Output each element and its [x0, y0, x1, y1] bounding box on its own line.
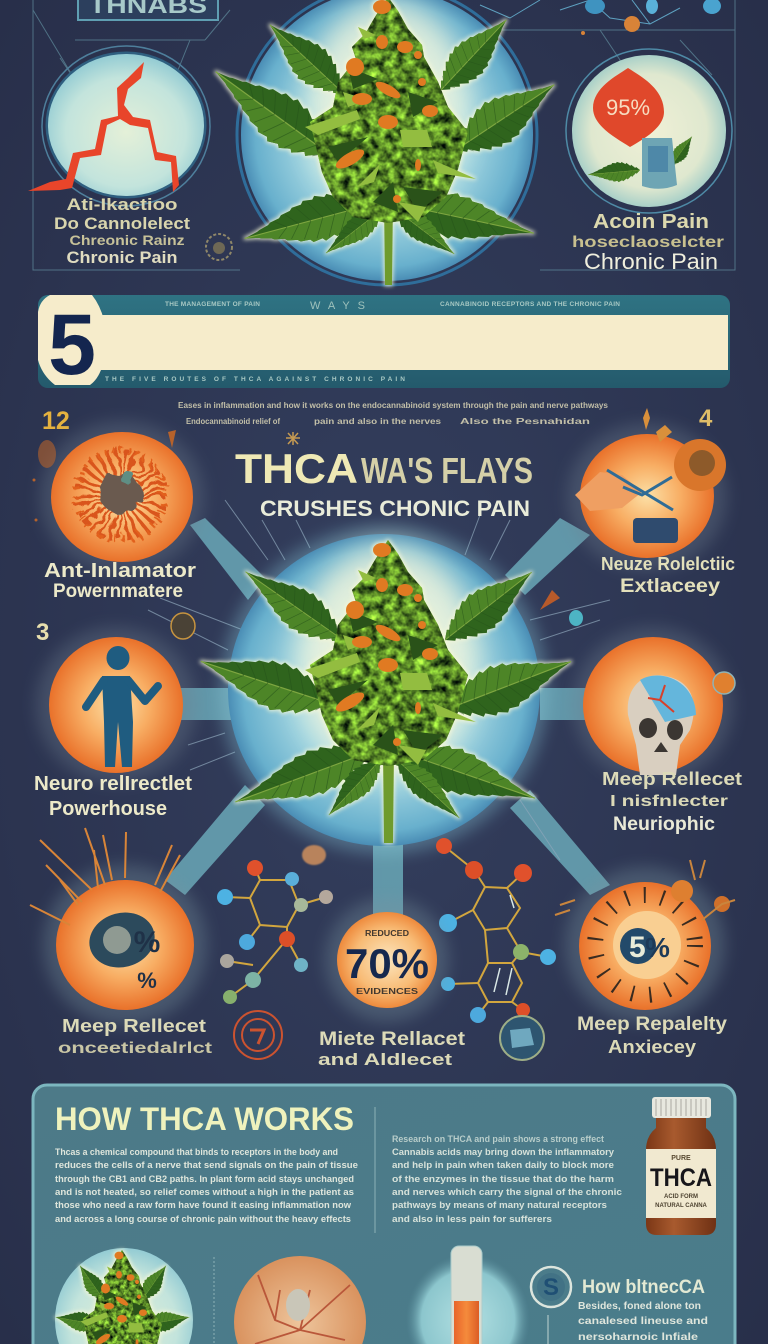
text block: right hero caption — [572, 211, 724, 274]
panel: left hero circle with pain chart — [28, 46, 210, 206]
text block: intro small print: Also the Pesnahidan — [460, 417, 590, 426]
banner: 5 ways — [38, 295, 730, 393]
text block: left hero caption: Ati-Ikactioo — [66, 195, 178, 214]
icon: inflamed burst — [76, 451, 164, 539]
icon: test tube — [406, 1246, 530, 1344]
icon: small round seal — [206, 234, 232, 260]
text block: lower right label: Meep Repalelty — [577, 1014, 727, 1035]
heading: how THCA works: HOW THCA WORKS — [55, 1101, 354, 1137]
text block: upper right label — [601, 554, 735, 597]
title: THCA ways flays: WA'S FLAYS — [361, 450, 533, 491]
subtitle: crushes chronic pain: CRUSHES CHONIC PAIN — [260, 496, 530, 521]
badge: THNABS — [78, 0, 218, 20]
numeral: 12: 12 — [42, 407, 70, 435]
illustration: central cannabis plant — [193, 540, 580, 843]
text block: left column — [55, 1147, 358, 1224]
chart: right molecule — [436, 838, 556, 1023]
text block: right column: and help in pain when taken daily to block more — [392, 1160, 614, 1170]
icon: small star above title — [286, 432, 300, 445]
text block: anti-inflammatory label: Powernmatere — [53, 581, 183, 602]
icon: red percentage drop: 95% — [606, 95, 650, 120]
banner small text: THE MANAGEMENT OF PAIN — [165, 301, 260, 308]
panel: hero centre circle — [237, 0, 537, 285]
panel: centre 70 percent circle — [325, 898, 449, 1022]
icon: dark percent blob: % — [137, 968, 157, 993]
divider — [374, 1107, 376, 1233]
icon: 5 percent dial: % — [645, 932, 670, 963]
icon: sparks and orange node right — [555, 860, 735, 920]
icon: small orange ball — [713, 672, 735, 694]
text block: anti-inflammatory label: Ant-Inlamator — [44, 560, 196, 582]
icon: sparks right of centre — [540, 590, 583, 626]
text block: left column: and across a long course of chronic pain without the heavy effects — [55, 1214, 351, 1224]
text block: how it works mini column: canalesed lineuse and — [578, 1316, 708, 1327]
icon: THCA bottle: ACID FORM — [664, 1194, 698, 1200]
icon: burst rays — [30, 828, 180, 925]
text block: lower left label — [58, 1016, 213, 1057]
text block: anti-inflammatory label — [44, 560, 196, 602]
icon: dark percent blob — [83, 905, 161, 993]
icon: orange coin — [674, 439, 726, 491]
text block: how it works mini column: nersoharnoic lnfiale — [578, 1332, 699, 1343]
divider — [547, 1315, 549, 1344]
text block: left column: Thcas a chemical compound that binds to receptors in the body and — [55, 1147, 338, 1157]
small label above percent: REDUCED — [365, 929, 409, 938]
text block: right column: Cannabis acids may bring down the inflammatory — [392, 1147, 614, 1157]
panel: central glow circle — [220, 526, 548, 854]
text block: left column: through the CB1 and CB2 paths. In plant form acid stays unchanged — [55, 1174, 354, 1184]
icon: skull — [628, 675, 696, 775]
chart: left molecule — [217, 845, 333, 1004]
icon: sparks upper right — [643, 408, 672, 442]
text block: lower right label — [577, 1014, 727, 1057]
text block: intro small print: Endocannabinoid relief of — [186, 417, 280, 426]
panel: lower left circle — [30, 828, 207, 1025]
text block: intro small print: Eases in inflammation and how it works on the endocannabinoid system through the pain and nerve pathways — [178, 401, 609, 410]
icon: hand with blue tool — [575, 470, 678, 543]
icon: red ring — [234, 1011, 282, 1059]
icon: nerve circle — [234, 1256, 366, 1344]
text block: left column: those who need a raw form have found it easing inflammation now — [55, 1200, 352, 1210]
divider — [213, 1257, 215, 1344]
panel: lower right circle — [565, 867, 725, 1023]
text block: skull label — [602, 769, 742, 835]
panel: upper right circle — [567, 423, 727, 571]
text block: right hero caption: Acoin Pain — [593, 211, 709, 233]
text block: right column: pathways by means of many natural receptors — [392, 1200, 607, 1210]
icon: THCA bottle: PURE — [671, 1155, 691, 1162]
text block: neuro powerhouse label: Powerhouse — [49, 798, 167, 820]
text block: upper right label: Extlaceey — [620, 576, 720, 597]
icon: dark percent blob: % — [134, 926, 160, 959]
text block: right hero caption: Chronic Pain — [584, 249, 718, 274]
banner small text: WAYS — [310, 300, 365, 312]
icon: THCA bottle: NATURAL CANNA — [655, 1203, 708, 1209]
icon: THCA bottle — [646, 1097, 716, 1235]
text block: right column: and nerves which carry the signal of the chronic — [392, 1187, 622, 1197]
small label below percent: EVIDENCES — [356, 987, 419, 996]
decorative connector bands — [165, 518, 610, 920]
title: THCA ways flays: THCA — [235, 445, 358, 492]
text block: left hero caption — [54, 195, 190, 267]
panel: top hero frame — [33, 0, 735, 270]
icon: THCA bottle: THCA — [650, 1164, 712, 1192]
text block: skull label: Neuriophic — [613, 814, 715, 835]
text block: left hero caption: Do Cannolelect — [54, 214, 190, 233]
title: THCA ways flays — [235, 445, 533, 492]
banner small text — [105, 300, 620, 383]
text block: lower right label: Anxiecey — [608, 1037, 696, 1057]
decorative thin ray lines around centre — [148, 500, 610, 860]
text block: lower left label: onceetiedalrlct — [58, 1040, 213, 1057]
icon: red percentage drop — [593, 68, 664, 147]
text block: how it works mini column: How bltnecCA — [582, 1277, 705, 1298]
text block: right column: and also in less pain for sufferers — [392, 1214, 552, 1224]
icon: 5 percent dial — [613, 911, 681, 979]
banner small text: THE FIVE ROUTES OF THCA AGAINST CHRONIC PAIN — [105, 376, 405, 383]
panel: person circle — [36, 627, 196, 783]
icon: person — [86, 646, 158, 767]
icon: mini plant circle — [54, 1248, 193, 1344]
text block: neuro powerhouse label: Neuro relIrectlet — [34, 773, 192, 795]
text block: neuro powerhouse label — [34, 773, 192, 820]
panel: right hero circle with percentage — [566, 49, 732, 213]
text block: right column: of the enzymes in the tissue that do the harm — [392, 1174, 614, 1184]
text block: intro small print — [178, 401, 609, 426]
text block: skull label: Meep Rellecet — [602, 769, 742, 789]
text block: centre label: Miete Rellacet — [319, 1029, 466, 1050]
icon: leaves and blue package — [587, 132, 698, 189]
panel: how THCA works — [33, 1085, 735, 1344]
icon: red zigzag pain chart — [28, 62, 179, 192]
panel: anti-inflammatory circle — [40, 421, 204, 573]
text block: left hero caption: Chronic Pain — [66, 248, 178, 267]
icon: blue ring with puzzle — [500, 1016, 544, 1060]
panel: skull circle — [573, 627, 733, 783]
text block: left column: and is not heated, so relief comes without a high in the patient as — [55, 1187, 354, 1197]
text block: right column — [392, 1134, 622, 1224]
banner small text: CANNABINOID RECEPTORS AND THE CHRONIC PAIN — [440, 301, 620, 308]
text block: intro small print: pain and also in the nerves — [314, 417, 442, 426]
percentage: 70%: 70% — [345, 940, 429, 987]
text block: centre label: and Aldlecet — [318, 1050, 452, 1069]
text block: skull label: I nisfnlecter — [610, 793, 728, 810]
icon: S badge: S — [543, 1274, 559, 1301]
text block: lower left label: Meep Rellecet — [62, 1016, 206, 1036]
text block: centre label — [318, 1029, 466, 1069]
numeral: 4: 4 — [699, 405, 713, 432]
numeral: 3: 3 — [36, 619, 49, 646]
icons: top right network — [480, 0, 721, 35]
icon: S badge — [531, 1267, 571, 1307]
text block: right hero caption: hoseclaoselcter — [572, 234, 724, 251]
text block: left column: reduces the cells of a nerve that send signals on the pain of tissue — [55, 1160, 358, 1170]
illustration: hero cannabis plant — [200, 0, 568, 285]
icon: 5 percent dial: 5 — [629, 931, 646, 964]
text block: left hero caption: Chreonic Rainz — [70, 232, 184, 248]
icon: capsule outline — [171, 613, 195, 639]
text block: right column: Research on THCA and pain shows a strong effect — [392, 1134, 604, 1144]
text block: how it works mini column — [578, 1277, 708, 1343]
icon: honeycomb and sparks left — [32, 430, 176, 522]
text block: how it works mini column: Besides, foned alone ton — [578, 1301, 701, 1312]
badge: number 5: 5 — [48, 297, 96, 393]
banner cream strip — [95, 315, 728, 370]
text block: upper right label: Neuze Rolelctiic — [601, 554, 735, 574]
